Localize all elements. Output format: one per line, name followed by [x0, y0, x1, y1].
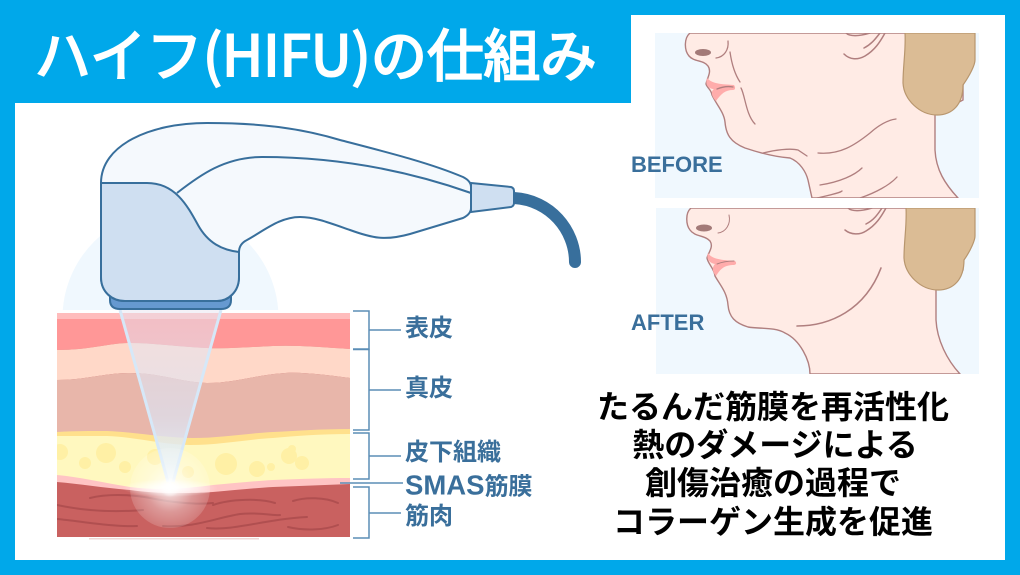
fat top band [57, 429, 350, 445]
handpiece grip line [177, 157, 471, 193]
handpiece connector [471, 183, 514, 212]
layer labels: 真皮 [405, 368, 453, 403]
description text: 熱のダメージによる [632, 427, 918, 463]
after illustration [656, 208, 979, 374]
SMAS layer [57, 475, 350, 495]
before illustration [655, 33, 979, 198]
layer labels: 筋肉 [405, 496, 453, 531]
before face [685, 33, 963, 198]
before wrinkles [716, 41, 897, 198]
after label: AFTER [631, 310, 704, 335]
skin shadow line [89, 538, 259, 540]
handpiece cable [514, 198, 575, 262]
before nostril [695, 49, 711, 56]
after nostril [696, 224, 712, 232]
description text: 創傷治癒の過程で [645, 465, 901, 501]
muscle fibres [57, 495, 338, 529]
epidermis [57, 319, 350, 350]
after face [687, 208, 963, 374]
description text: たるんだ筋膜を再活性化 [597, 389, 949, 425]
layer labels: 皮下組織 [405, 432, 501, 467]
handpiece base [110, 292, 231, 309]
after ear [845, 208, 886, 234]
handpiece front panel [101, 183, 239, 301]
skin cross-section [52, 313, 350, 537]
layer labels: SMAS筋膜 [405, 470, 532, 500]
layer labels: 表皮 [405, 308, 453, 343]
before lips [706, 78, 735, 101]
ultrasound beam [120, 310, 221, 487]
muscle [57, 482, 350, 495]
after hair [904, 208, 975, 290]
after jaw line [717, 215, 881, 326]
halo behind handpiece [63, 236, 278, 310]
dermis lower [57, 373, 350, 440]
description text [597, 389, 949, 540]
before label: BEFORE [631, 152, 723, 177]
title: ハイフ(HIFU)の仕組み [34, 11, 597, 93]
layer brackets [340, 311, 403, 538]
subcutaneous fat [57, 434, 350, 490]
before ear [844, 33, 885, 59]
layer labels [405, 308, 532, 531]
fat globules [52, 443, 309, 478]
description text: コラーゲン生成を促進 [613, 504, 933, 540]
dermis upper [57, 343, 350, 383]
before hair [903, 33, 975, 115]
after lips [707, 253, 736, 276]
title banner [0, 0, 631, 103]
focal glow [122, 448, 218, 528]
handpiece body [101, 123, 471, 301]
